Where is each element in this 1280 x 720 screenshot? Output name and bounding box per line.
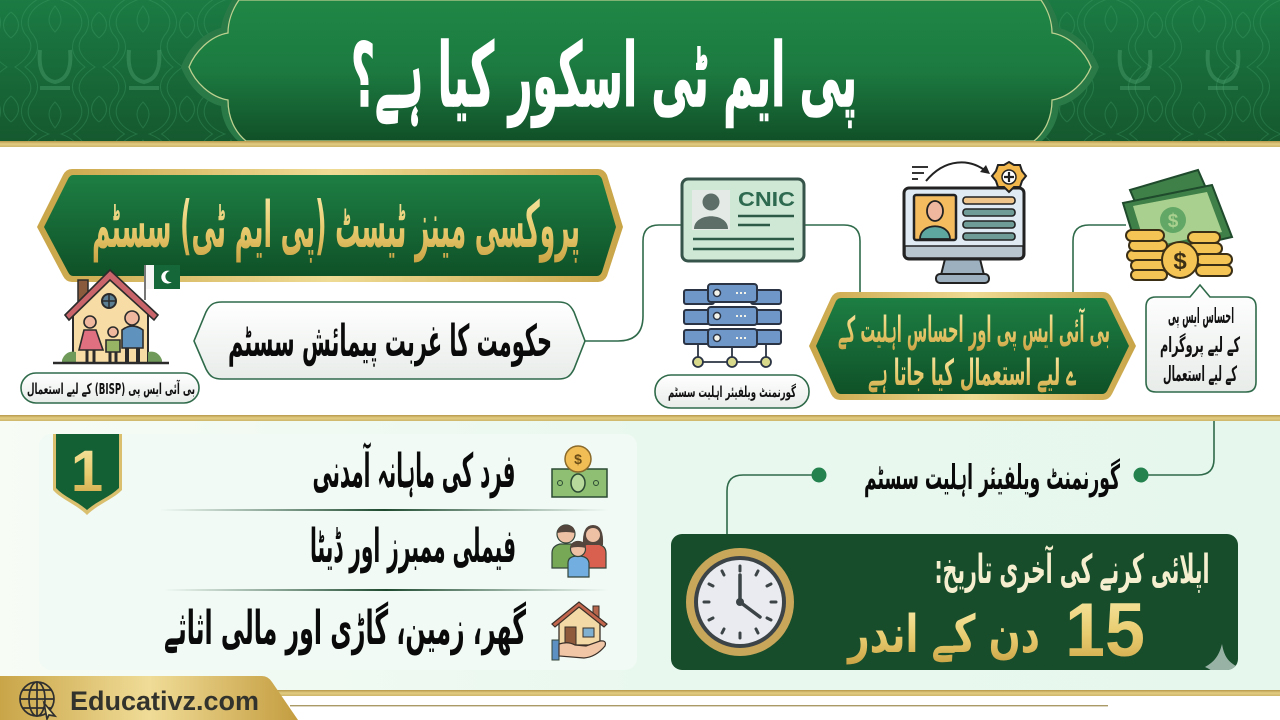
icon: house on hand	[552, 602, 607, 660]
panel: eligibility plaque	[809, 292, 1136, 400]
badge: number one shield	[53, 434, 122, 515]
icon: banknote with coin	[552, 446, 607, 497]
emblems: crescents	[40, 50, 1238, 88]
footer website tab	[0, 676, 298, 720]
icon: server network	[684, 284, 781, 367]
icon: cash and coins	[1123, 170, 1232, 280]
panel: criteria list: فرد کی ماہانہ آمدنی	[312, 441, 516, 499]
icon: CNIC card	[682, 179, 804, 261]
icon: cash and coins: $	[1168, 211, 1179, 232]
pill: government poverty measure: حکومت کا غربت پیمائش سسٹم	[228, 316, 552, 367]
watermark sparkle	[1205, 644, 1236, 670]
deadline number: 15	[1065, 588, 1145, 673]
pill: welfare eligibility system	[655, 375, 809, 408]
section backgrounds	[0, 146, 1280, 720]
callout: Ehsaas program	[1146, 285, 1256, 392]
icon: globe	[20, 682, 55, 719]
icon: clock	[686, 548, 794, 656]
header gold strip	[0, 141, 1280, 147]
pill: government poverty measure	[194, 302, 585, 379]
panel: criteria list	[39, 434, 637, 670]
header banner	[0, 0, 1280, 141]
icon: house with family and flag	[53, 265, 180, 363]
icon: banknote with coin: $	[574, 451, 582, 467]
icon: family	[552, 525, 606, 577]
connector: welfare label links	[727, 421, 1214, 534]
icon: cash and coins: $	[1173, 248, 1187, 275]
pill: BISP usage: بی آئی ایس پی (BISP) کے لیے استعمال	[27, 380, 195, 399]
footer gold strip	[270, 690, 1280, 706]
row 3 text: گھر، زمین، گاڑی اور مالی اثاثے	[164, 601, 526, 656]
connectors upper	[585, 225, 1126, 341]
panel: proxy means test plaque	[37, 169, 623, 282]
panel: application deadline	[671, 534, 1238, 670]
badge: number one shield: 1	[71, 439, 103, 504]
middle gold strip	[0, 415, 1280, 421]
pill: welfare eligibility system: گورنمنٹ ویلفیئر اہلیت سسٹم	[668, 383, 796, 401]
deadline unit: دن کے اندر	[846, 605, 1040, 665]
icon: monitor with profile	[904, 162, 1026, 283]
pill: BISP usage	[21, 373, 199, 403]
panel: criteria list: فیملی ممبرز اور ڈیٹا	[310, 519, 516, 574]
website text: Educativz.com	[70, 686, 259, 716]
icon: CNIC card: CNIC	[738, 189, 795, 211]
